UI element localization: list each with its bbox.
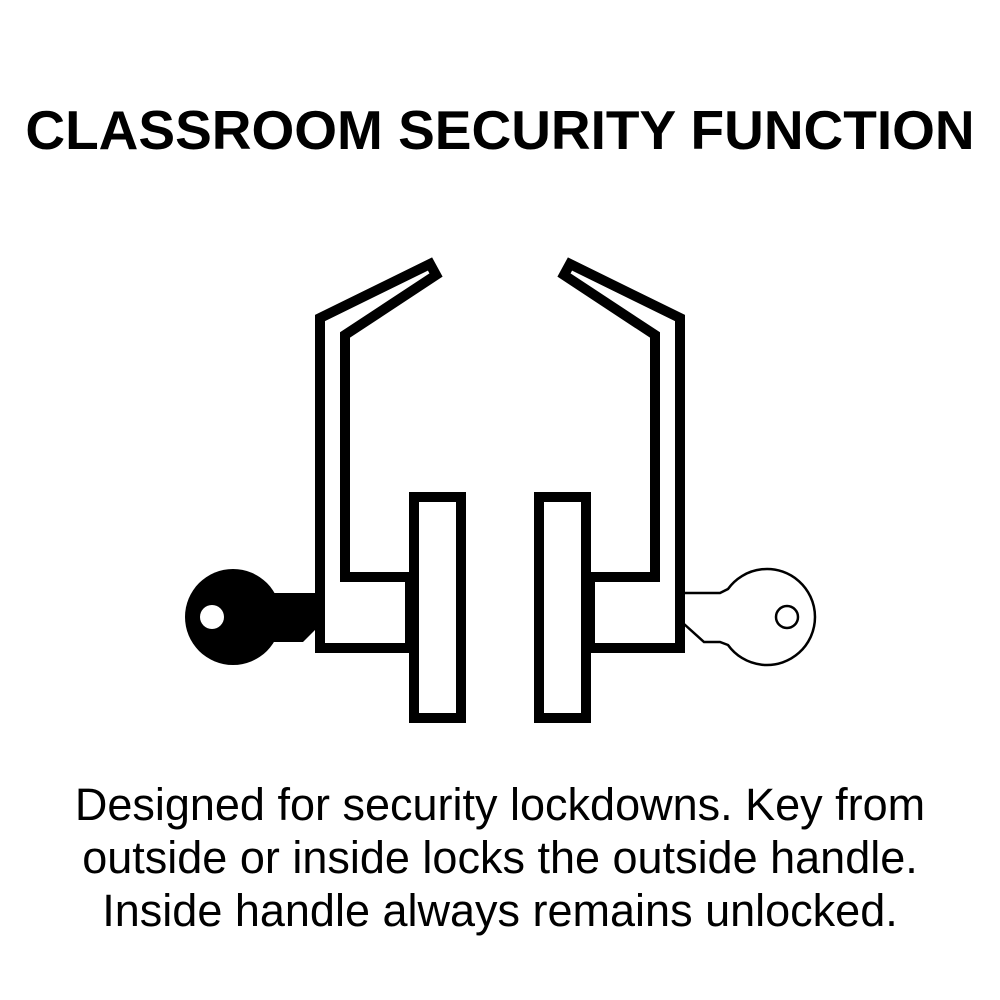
left lever with outside key xyxy=(185,264,461,718)
right lever handle xyxy=(564,264,680,648)
title: CLASSROOM SECURITY FUNCTION xyxy=(25,99,975,161)
description text xyxy=(75,779,925,936)
description text: Inside handle always remains unlocked. xyxy=(102,885,898,936)
right rose xyxy=(539,497,586,718)
description text: outside or inside locks the outside handle. xyxy=(82,832,918,883)
icon: black key xyxy=(185,569,320,665)
left rose xyxy=(414,497,461,718)
left lever handle xyxy=(320,264,436,648)
description text: Designed for security lockdowns. Key from xyxy=(75,779,925,830)
icon: white key xyxy=(684,569,815,665)
right lever with inside key xyxy=(539,264,815,718)
